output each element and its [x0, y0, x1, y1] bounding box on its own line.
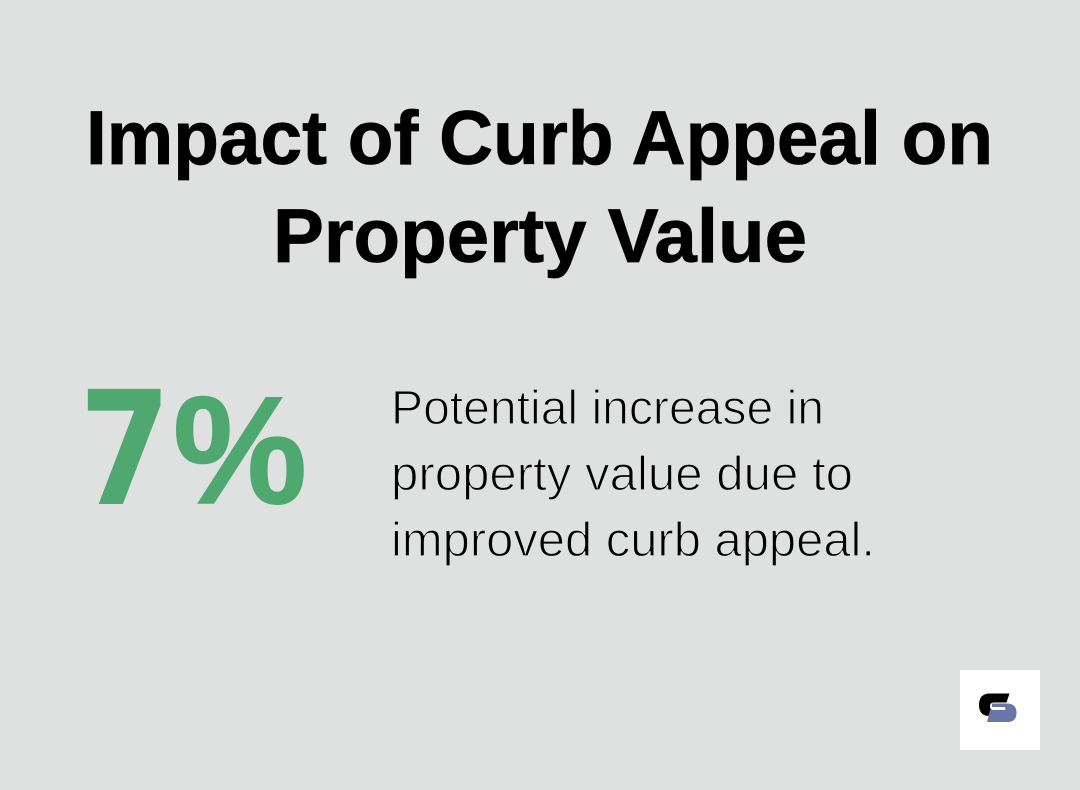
- icon: black S upper stroke: [979, 694, 1010, 716]
- title: [86, 96, 993, 279]
- description text: Potential increase in: [391, 382, 824, 435]
- description text: [391, 382, 875, 567]
- icon: blue D lower stroke: [987, 704, 1016, 722]
- title: Property Value: [273, 194, 807, 279]
- title: Impact of Curb Appeal on: [86, 96, 993, 181]
- statistic: 7%: %: [173, 365, 307, 536]
- statistic: 7%: 7: [79, 358, 171, 542]
- description text: improved curb appeal.: [391, 514, 875, 567]
- description text: property value due to: [391, 448, 853, 501]
- logo badge: [960, 670, 1040, 750]
- statistic: 7%: [79, 358, 307, 542]
